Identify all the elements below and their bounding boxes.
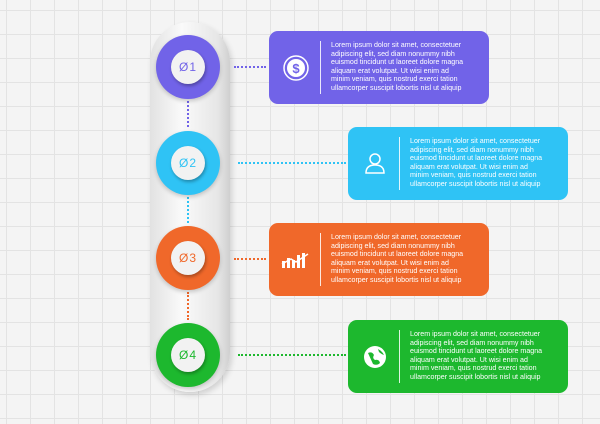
text 3: minim veniam, quis nostrud exerci tation	[331, 267, 458, 275]
text 4: Lorem ipsum dolor sit amet, consectetuer	[410, 330, 540, 338]
text 2	[410, 137, 542, 188]
circle 04: Ø4	[179, 348, 197, 362]
circle 02: Ø2	[179, 156, 197, 170]
text 1: aliquam erat volutpat. Ut wisi enim ad	[331, 67, 449, 75]
panel 4	[348, 320, 568, 393]
circle 01: Ø1	[179, 60, 197, 74]
text 1	[331, 41, 464, 92]
text 1: euismod tincidunt ut laoreet dolore magna	[331, 58, 463, 66]
text 4: ullamcorper suscipit lobortis nisl ut aliquip	[410, 373, 541, 381]
panel 1	[269, 31, 489, 104]
text 1: adipiscing elit, sed diam nonummy nibh	[331, 50, 455, 58]
text 3	[331, 233, 464, 284]
text 2: aliquam erat volutpat. Ut wisi enim ad	[410, 163, 528, 171]
text 2: minim veniam, quis nostrud exerci tation	[410, 171, 537, 179]
icon: dollar	[283, 55, 309, 81]
text 1: ullamcorper suscipit lobortis nisl ut aliquip	[331, 84, 462, 92]
panel 2	[348, 127, 568, 200]
text 3: Lorem ipsum dolor sit amet, consectetuer	[331, 233, 461, 241]
circle 01	[156, 35, 220, 99]
icon: globe	[364, 346, 386, 368]
circle 04	[156, 323, 220, 387]
circle 03	[156, 226, 220, 290]
icon: user	[365, 153, 385, 174]
dotted line 1	[234, 66, 266, 68]
text 3: aliquam erat volutpat. Ut wisi enim ad	[331, 259, 449, 267]
text 3: euismod tincidunt ut laoreet dolore magna	[331, 250, 463, 258]
text 2: adipiscing elit, sed diam nonummy nibh	[410, 146, 534, 154]
text 2: ullamcorper suscipit lobortis nisl ut aliquip	[410, 180, 541, 188]
dotted line 4	[238, 354, 346, 356]
text 4	[410, 330, 542, 381]
dotted line 3	[234, 258, 266, 260]
text 3: ullamcorper suscipit lobortis nisl ut aliquip	[331, 276, 462, 284]
text 4: euismod tincidunt ut laoreet dolore magna	[410, 347, 542, 355]
circle 02	[156, 131, 220, 195]
dotted line 2	[238, 162, 346, 164]
pill background	[150, 22, 230, 392]
panel 3	[269, 223, 489, 296]
text 2: euismod tincidunt ut laoreet dolore magna	[410, 154, 542, 162]
text 4: minim veniam, quis nostrud exerci tation	[410, 364, 537, 372]
icon: chart	[282, 253, 308, 268]
text 1: Lorem ipsum dolor sit amet, consectetuer	[331, 41, 461, 49]
connectors	[187, 101, 189, 127]
text 2: Lorem ipsum dolor sit amet, consectetuer	[410, 137, 540, 145]
circle 03: Ø3	[179, 251, 197, 265]
text 3: adipiscing elit, sed diam nonummy nibh	[331, 242, 455, 250]
icon: dollar: $	[292, 61, 300, 76]
text 4: aliquam erat volutpat. Ut wisi enim ad	[410, 356, 528, 364]
text 1: minim veniam, quis nostrud exerci tation	[331, 75, 458, 83]
text 4: adipiscing elit, sed diam nonummy nibh	[410, 339, 534, 347]
